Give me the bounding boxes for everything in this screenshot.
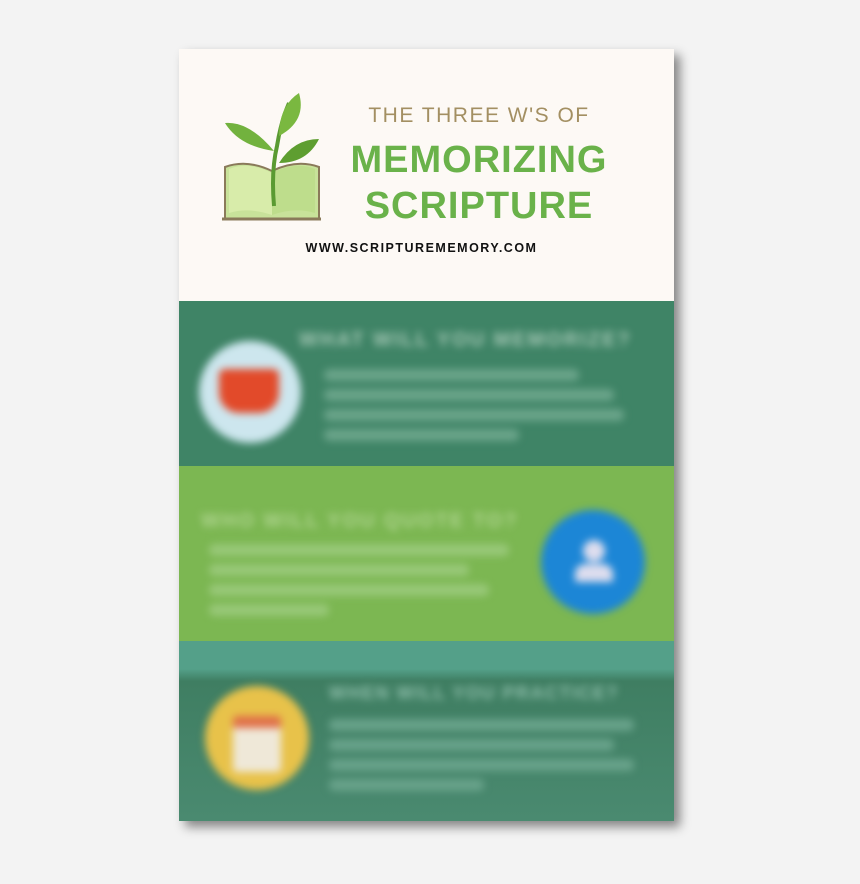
panel: what	[179, 301, 674, 466]
text block	[322, 366, 626, 444]
text block	[207, 541, 511, 619]
header panel	[179, 49, 674, 301]
heading: who will you quote to: WHO WILL YOU QUOTE TO?	[201, 510, 518, 532]
card	[179, 49, 674, 821]
heading: the three w's of: THE THREE W'S OF	[368, 104, 590, 127]
title: memorizing scripture: SCRIPTURE	[365, 185, 593, 227]
url text: WWW.SCRIPTUREMEMORY.COM	[306, 241, 537, 255]
panel: who	[179, 466, 674, 641]
heading: when will you practice: WHEN WILL YOU PRACTICE?	[329, 683, 619, 703]
icon: person circle	[541, 510, 645, 614]
text block	[327, 716, 636, 794]
heading: what will you memorize: WHAT WILL YOU MEMORIZE?	[299, 329, 632, 351]
icon: sprout on book	[222, 93, 321, 220]
title: memorizing scripture: MEMORIZING	[350, 139, 607, 181]
panel: when	[179, 641, 674, 821]
icon: calendar circle	[205, 686, 309, 790]
icon: book circle	[199, 341, 301, 443]
title: memorizing scripture	[350, 139, 607, 227]
